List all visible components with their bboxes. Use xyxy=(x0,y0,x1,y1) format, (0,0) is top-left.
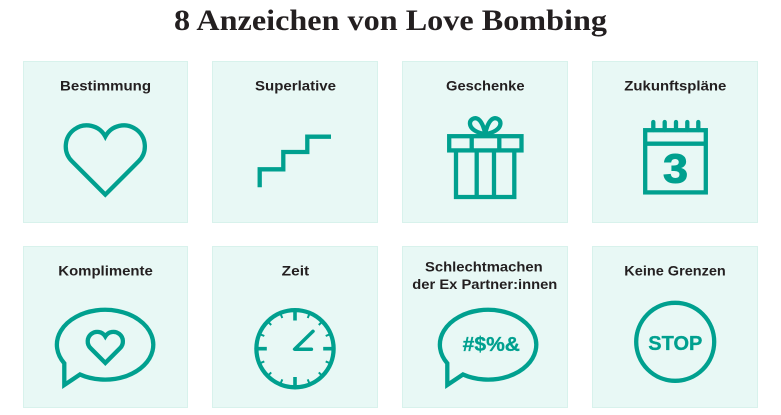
icon: heart xyxy=(66,125,145,195)
heading: Superlative: Superlative xyxy=(255,79,337,94)
heading: Bestimmung: Bestimmung xyxy=(60,79,151,94)
icon: stop sign: STOP xyxy=(648,333,702,355)
icon: calendar: 3 xyxy=(663,145,688,191)
heading: Schlechtmachen der Ex Partner:innen xyxy=(412,260,557,292)
icon: stairs xyxy=(260,137,331,187)
heading: Keine Grenzen: Keine Grenzen xyxy=(624,264,726,279)
panel: Zeit xyxy=(212,246,378,408)
heading: Schlechtmachen der Ex Partner:innen: der Ex Partner:innen xyxy=(412,277,557,292)
icon: clock xyxy=(256,310,334,387)
title: 8 Anzeichen von Love Bombing xyxy=(174,4,607,37)
panel: Zukunftspläne xyxy=(592,62,758,222)
panel: Schlechtmachen der Ex Partner:innen xyxy=(402,246,568,408)
panel: Bestimmung xyxy=(24,62,188,222)
icon: calendar xyxy=(645,122,706,192)
icon: speech bubble with symbols: #$%& xyxy=(463,334,520,356)
panel: Geschenke xyxy=(402,62,568,222)
icon: speech bubble with symbols xyxy=(440,310,536,385)
icon: stop sign xyxy=(636,303,714,381)
heading: Komplimente: Komplimente xyxy=(58,264,153,279)
panel: Superlative xyxy=(212,62,378,222)
icon: gift xyxy=(449,118,522,197)
icon: speech bubble with heart xyxy=(57,310,153,385)
panel: Keine Grenzen xyxy=(592,246,758,408)
panel: Komplimente xyxy=(24,246,188,408)
heading: Zukunftspläne: Zukunftspläne xyxy=(624,79,727,94)
heading: Schlechtmachen der Ex Partner:innen: Schlechtmachen xyxy=(425,260,543,275)
heading: Zeit: Zeit xyxy=(282,264,310,279)
heading: Geschenke: Geschenke xyxy=(446,79,525,94)
